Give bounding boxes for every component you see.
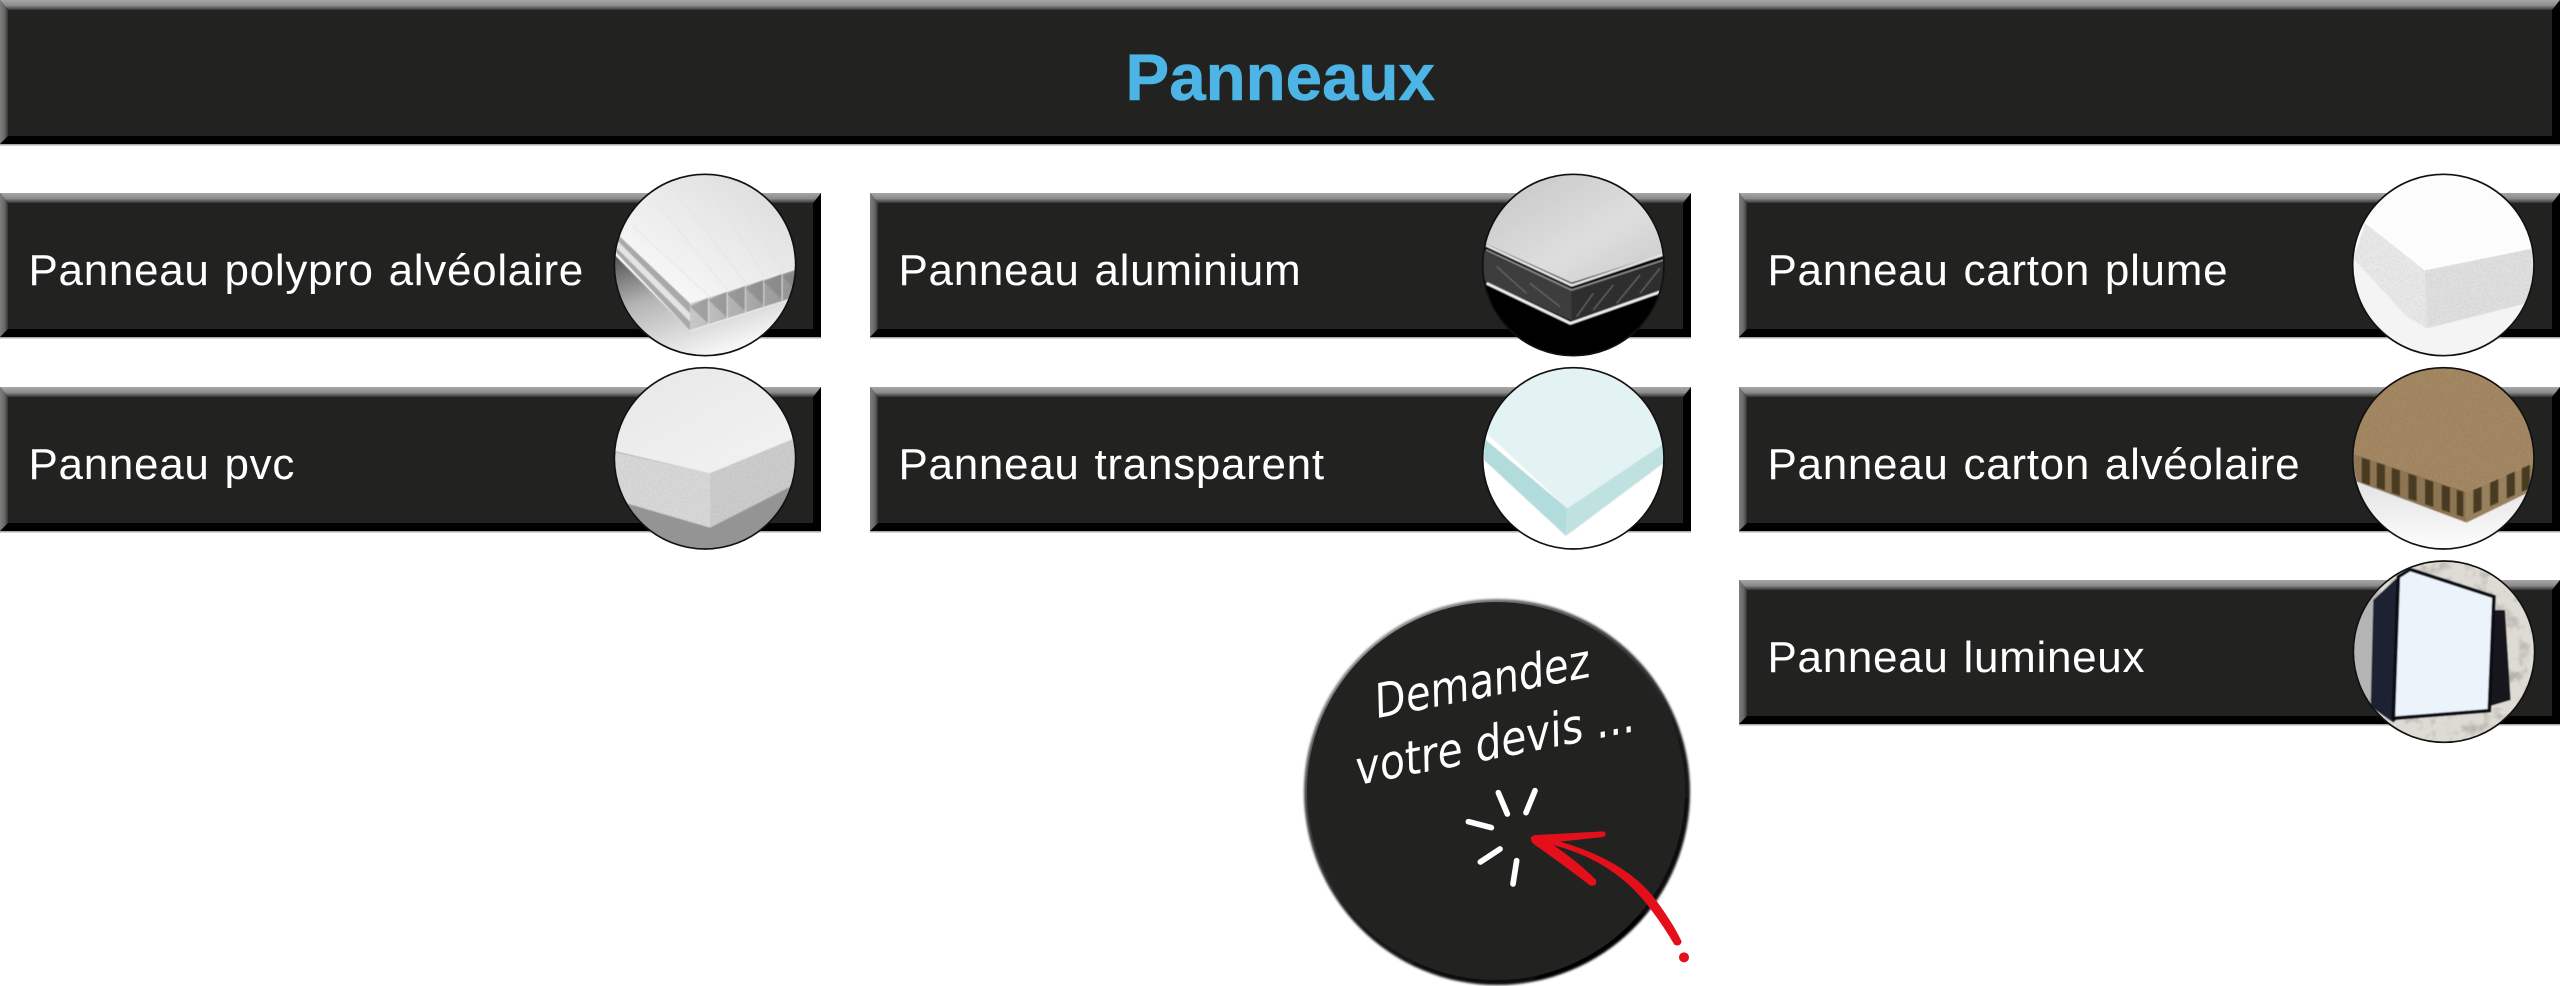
icon: aluminium composite board (1480, 170, 1670, 360)
icon: foam core board (2350, 170, 2540, 360)
panel: Panneau carton alvéolaire (1739, 387, 2560, 532)
handwritten text: Demandez (1370, 634, 1595, 730)
icon: illuminated sign box (2350, 557, 2540, 747)
icon: alveolar cardboard board (2350, 363, 2540, 553)
panel: Panneau lumineux (1739, 580, 2560, 726)
panel: Panneau pvc (0, 387, 821, 532)
callout disc (1304, 599, 1690, 985)
label: Panneau pvc (28, 440, 295, 489)
title banner (0, 0, 2560, 146)
panel: Panneau transparent (870, 387, 1691, 532)
label: Panneau carton alvéolaire (1768, 440, 2300, 489)
title: Panneaux (1126, 41, 1435, 114)
panel: Panneau polypro alvéolaire (0, 193, 821, 338)
label: Panneau polypro alvéolaire (28, 246, 584, 295)
label: Panneau carton plume (1768, 246, 2228, 295)
panel: Panneau aluminium (870, 193, 1691, 338)
label: Panneau aluminium (898, 246, 1301, 295)
handwritten text (1338, 628, 1639, 797)
arrow: red curved pointer (1531, 831, 1689, 962)
label: Panneau transparent (898, 440, 1325, 489)
icon: pvc foam board (610, 363, 803, 553)
panel: Panneau carton plume (1739, 193, 2560, 338)
icon: polypro alveolar board (610, 170, 803, 360)
icon: transparent board (1480, 363, 1670, 553)
handwritten text: votre devis ... (1350, 689, 1639, 797)
label: Panneau lumineux (1768, 633, 2145, 682)
icon: white sparks (1468, 791, 1535, 884)
callout: Demandez votre devis (1304, 599, 1690, 985)
